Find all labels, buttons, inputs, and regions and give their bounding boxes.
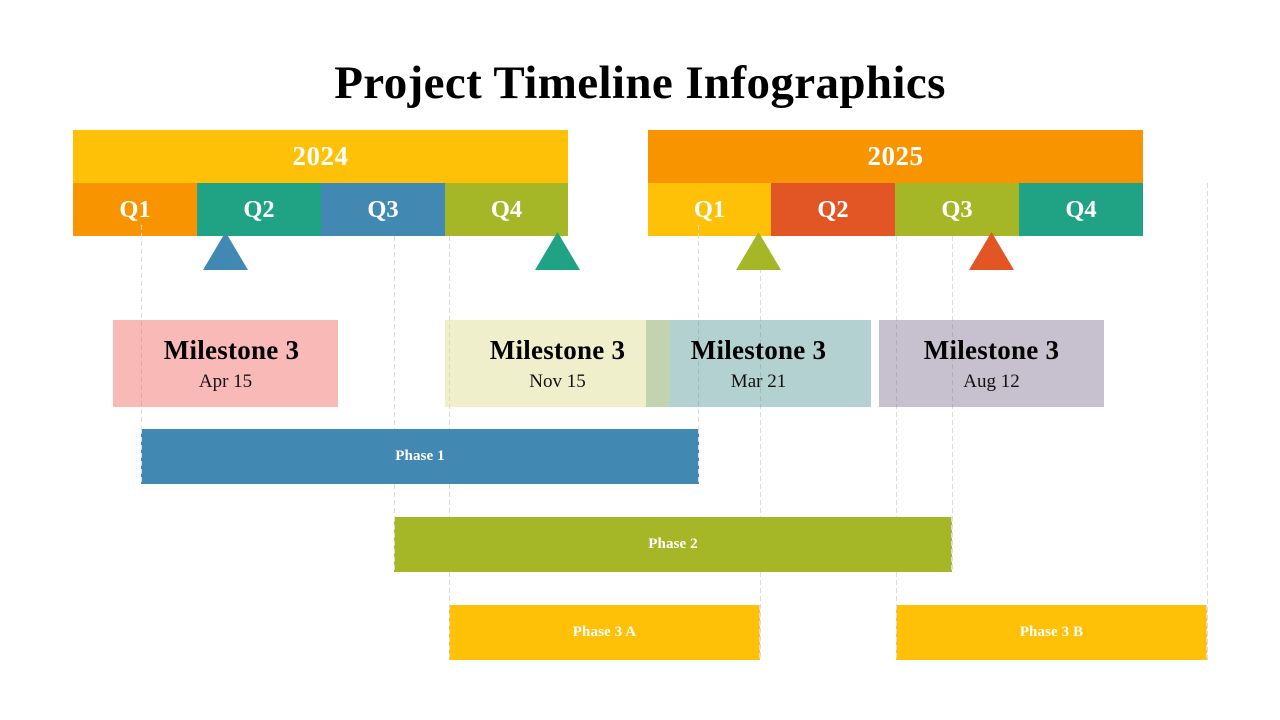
dashed guide: Phase 2 end <box>952 236 953 572</box>
icon: red triangle marker <box>969 232 1014 270</box>
phase bar: Phase 1 <box>141 429 699 484</box>
dashed guide: Phase 1 start <box>140 225 142 484</box>
quarter: 2024 Q2 <box>197 183 321 236</box>
quarter: 2025 Q4: Q4 <box>1065 196 1097 222</box>
year bar: 2024 <box>73 130 568 183</box>
phase bar: Phase 3 A <box>449 605 760 660</box>
icon: green triangle marker <box>535 232 580 270</box>
milestone box: Apr 15: Milestone 3 <box>164 335 299 365</box>
quarter: 2025 Q3 <box>895 183 1019 236</box>
dashed guide: Phase 3 A start <box>448 236 450 660</box>
milestone box: Aug 12: Aug 12 <box>963 371 1020 392</box>
milestone box: Apr 15 <box>113 320 338 407</box>
milestone box: Aug 12 <box>879 320 1104 407</box>
icon: olive triangle marker <box>736 232 781 270</box>
milestone box: Mar 21: Mar 21 <box>731 371 786 392</box>
quarter: 2024 Q1: Q1 <box>119 196 151 222</box>
title: Project Timeline Infographics <box>334 57 946 109</box>
phase bar: Phase 3 B: Phase 3 B <box>1020 624 1083 640</box>
milestone box: Mar 21 <box>646 320 871 407</box>
milestone box: Apr 15: Apr 15 <box>199 371 252 392</box>
milestone box: Nov 15: Nov 15 <box>529 371 586 392</box>
year bar: 2025 <box>648 130 1143 183</box>
dashed guide: Phase 1 end <box>698 225 699 484</box>
year bar: 2024: 2024 <box>292 141 348 171</box>
milestone box: Nov 15 <box>445 320 670 407</box>
phase bar: Phase 2: Phase 2 <box>648 536 698 552</box>
quarter: 2024 Q3 <box>321 183 445 236</box>
quarter: 2024 Q1 <box>73 183 197 236</box>
quarter: 2024 Q3: Q3 <box>367 196 399 222</box>
phase bar: Phase 1: Phase 1 <box>395 448 445 464</box>
quarter: 2025 Q2: Q2 <box>817 196 849 222</box>
milestone box: Aug 12: Milestone 3 <box>924 335 1059 365</box>
phase bar: Phase 3 A: Phase 3 A <box>573 624 636 640</box>
phase bar: Phase 3 B <box>896 605 1207 660</box>
year bar: 2025: 2025 <box>868 141 924 171</box>
dashed guide: Phase 2 start <box>394 236 395 572</box>
quarter: 2025 Q1: Q1 <box>694 196 725 222</box>
milestone box: Mar 21: Milestone 3 <box>691 335 826 365</box>
quarter: 2025 Q2 <box>771 183 895 236</box>
milestone box: Nov 15: Milestone 3 <box>490 335 625 365</box>
quarter: 2024 Q2: Q2 <box>243 196 275 222</box>
quarter: 2024 Q4: Q4 <box>491 196 522 222</box>
quarter: 2025 Q4 <box>1019 183 1143 236</box>
dashed guide: Phase 3 B end <box>1206 183 1208 660</box>
icon: blue triangle marker <box>203 232 248 270</box>
quarter: 2024 Q4 <box>445 183 568 236</box>
phase bar: Phase 2 <box>394 517 952 572</box>
quarter: 2025 Q1 <box>648 183 771 236</box>
dashed guide: Phase 3 A end <box>760 236 761 660</box>
quarter: 2025 Q3: Q3 <box>941 196 973 222</box>
dashed guide: Phase 3 B start <box>896 236 897 660</box>
